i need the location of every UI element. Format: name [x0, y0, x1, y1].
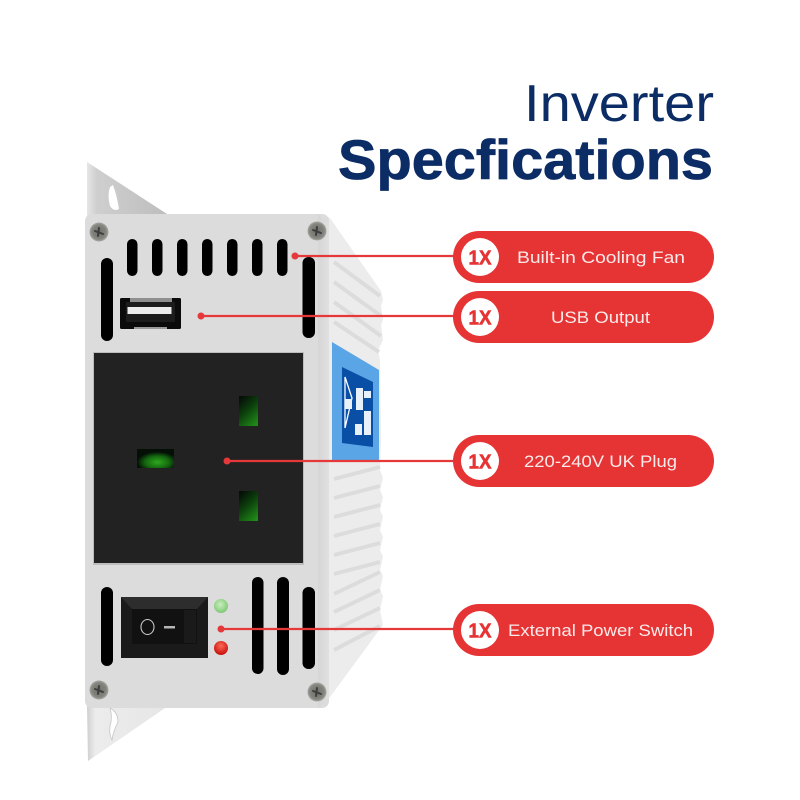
label: USB Output — [551, 308, 650, 327]
corner screws — [90, 222, 326, 702]
socket bottom pin slot — [239, 491, 258, 521]
badge: 1X — [468, 452, 492, 474]
badge — [461, 611, 499, 649]
badge — [461, 238, 499, 276]
label: Built-in Cooling Fan — [517, 248, 685, 267]
socket earth pin slot — [137, 449, 174, 468]
badge — [461, 442, 499, 480]
bottom vent slots — [101, 577, 315, 675]
blue product label — [332, 342, 379, 460]
pill — [453, 231, 714, 283]
heat sink fins — [322, 214, 383, 708]
title line: Inverter: Inverter — [524, 75, 714, 133]
UK socket — [93, 352, 304, 565]
USB port — [120, 298, 181, 329]
callout: Built-in Cooling Fan — [292, 231, 714, 283]
connector line — [198, 312, 460, 320]
pill — [453, 604, 714, 656]
pill — [453, 435, 714, 487]
red LED — [214, 641, 228, 655]
title line: Specfications: Specfications — [338, 128, 713, 191]
top vent slots — [101, 239, 315, 341]
callout: 220-240V UK Plug — [224, 435, 714, 487]
pill — [453, 291, 714, 343]
badge: 1X — [468, 308, 492, 330]
connector line — [224, 458, 460, 464]
inverter device — [85, 162, 383, 761]
title — [338, 75, 714, 191]
socket top pin slot — [239, 396, 258, 426]
top mounting bracket — [87, 162, 167, 216]
badge: 1X — [468, 248, 492, 270]
callout: USB Output — [198, 291, 714, 343]
green LED — [214, 599, 228, 613]
callout: External Power Switch — [218, 604, 714, 656]
badge — [461, 298, 499, 336]
badge: 1X — [468, 620, 492, 642]
front panel — [85, 214, 329, 708]
bottom mounting bracket — [87, 706, 168, 761]
rocker power switch — [121, 597, 208, 658]
connector line — [292, 252, 460, 260]
label: 220-240V UK Plug — [524, 452, 677, 471]
label: External Power Switch — [508, 621, 693, 640]
connector line — [218, 626, 460, 632]
